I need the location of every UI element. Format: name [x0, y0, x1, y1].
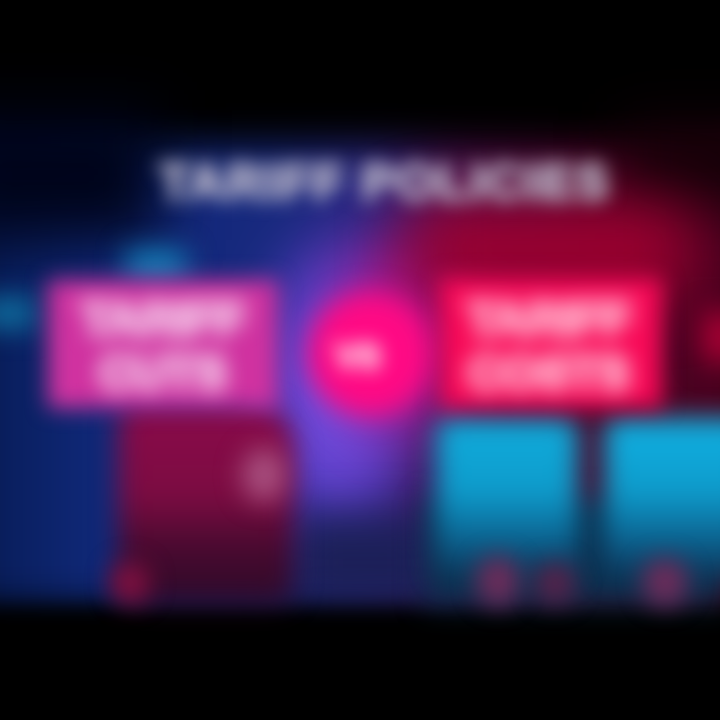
top left dark corner: [0, 110, 160, 240]
left label text: [70, 285, 258, 405]
panel: right cyan figure two: [604, 418, 720, 578]
right label text: COSTS: [468, 346, 630, 399]
panel: left figure dark crimson: [118, 405, 294, 605]
panel: right cyan figure one: [436, 418, 578, 578]
teal accent left of first box: [0, 298, 36, 328]
dark teal ground behind cyan figures: [425, 500, 720, 605]
bottom centre darkening: [290, 515, 440, 610]
cyan figure feet, pink second: [534, 562, 576, 604]
cyan figure feet, pink third: [642, 558, 688, 606]
panel: left pink label: [48, 280, 278, 408]
left figure foot: [110, 562, 150, 604]
left figure highlight: [242, 448, 286, 502]
vs text: VS: [335, 338, 381, 376]
right label text: [454, 284, 644, 406]
left label text: TARIFF: [81, 292, 245, 345]
title: TARIFF POLICIES: [159, 154, 611, 210]
background glow: blue left, purple centre, crimson right: [0, 110, 720, 610]
red accent at right edge: [702, 312, 720, 362]
teal accent above first box: [126, 250, 186, 282]
cyan figure feet, pink: [476, 556, 520, 606]
top black band: [0, 0, 720, 145]
red glow right: [410, 205, 690, 295]
left label text: CUTS: [99, 346, 227, 399]
top right dark corner: [620, 120, 720, 210]
right label text: TARIFF: [467, 292, 631, 345]
pink glow behind vs: [335, 240, 465, 430]
bottom black band: [0, 608, 720, 720]
panel: right red label: [440, 278, 662, 408]
vs circle: [308, 292, 432, 416]
